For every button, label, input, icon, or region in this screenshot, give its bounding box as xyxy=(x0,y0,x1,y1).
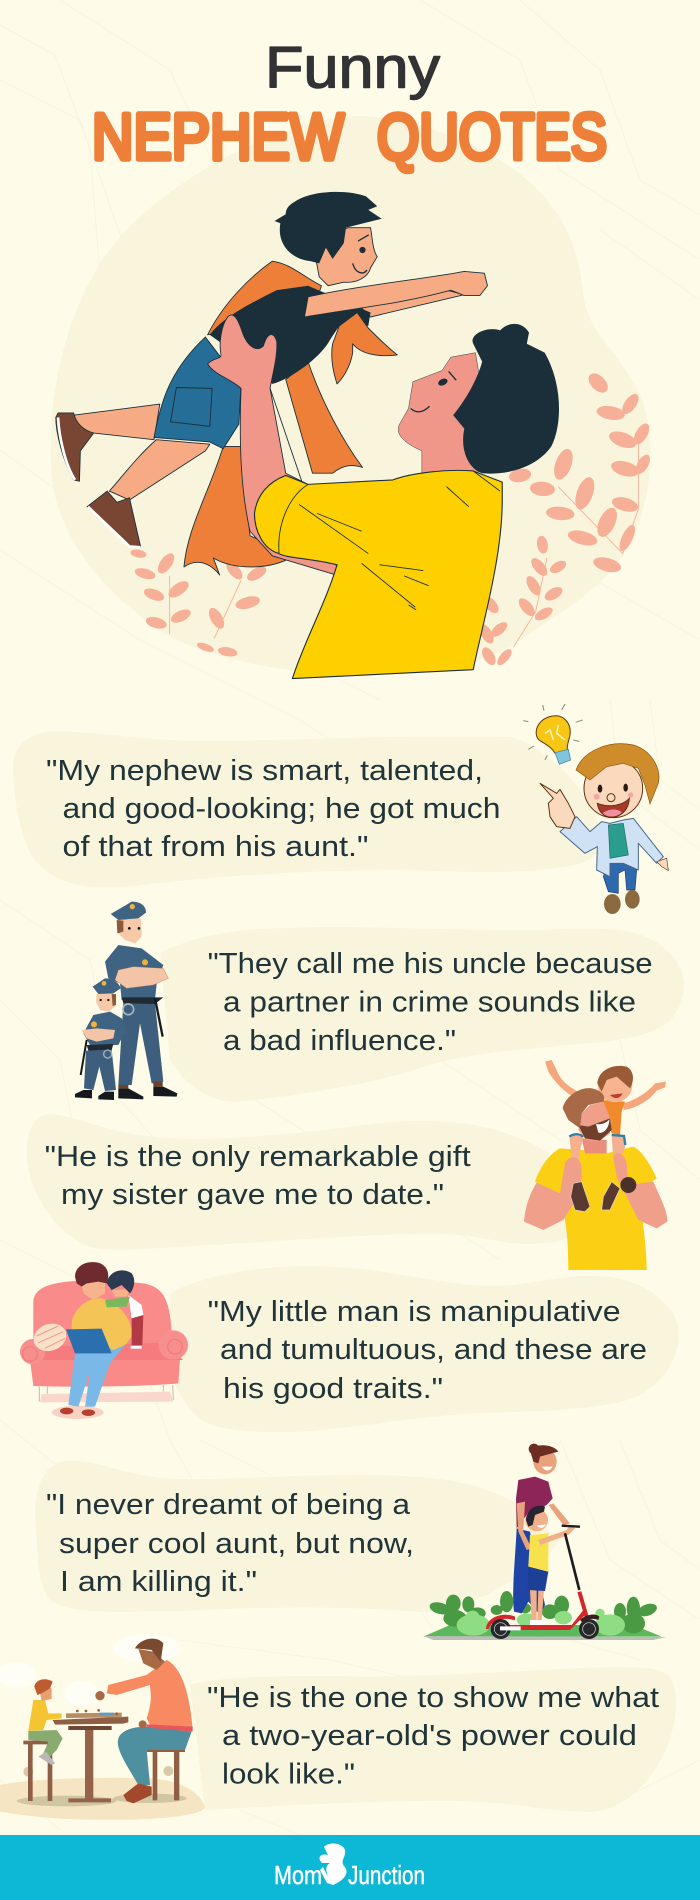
icon: aunt and nephew on sofa xyxy=(20,1262,188,1419)
decorative leaves xyxy=(130,370,653,668)
quote 1 text: and good-looking; he got much xyxy=(62,793,500,825)
father's neck and head xyxy=(563,1088,612,1153)
man: arms and hand xyxy=(208,315,339,576)
logo: MomJunction: Junction xyxy=(348,1860,425,1890)
panel: quote 4 xyxy=(170,1266,679,1432)
ground xyxy=(423,1625,667,1640)
panel: quote 3 xyxy=(27,1114,586,1250)
man: neck and face xyxy=(398,324,559,482)
title: nephew: NEPHEW xyxy=(92,100,345,173)
quote 5 text: I am killing it." xyxy=(60,1566,257,1598)
nephew xyxy=(105,1270,143,1349)
footer bar xyxy=(0,1835,700,1900)
floor shadow xyxy=(52,1406,104,1419)
icon: aunt and nephew on scooter xyxy=(423,1444,667,1640)
quote 2 text: "They call me his uncle because xyxy=(208,948,653,980)
title: Funny xyxy=(265,36,440,100)
quote 4 text: "My little man is manipulative xyxy=(208,1296,621,1328)
child legs xyxy=(569,1134,625,1163)
quote 2 bubble xyxy=(160,927,684,1102)
child arms xyxy=(545,1060,666,1110)
quote 3 text: my sister gave me to date." xyxy=(61,1179,444,1211)
boy: front arm and fist xyxy=(304,271,488,317)
quote 2 text: a partner in crime sounds like xyxy=(223,986,636,1018)
boy: shorts xyxy=(154,337,241,449)
title xyxy=(92,36,607,173)
stools xyxy=(23,1741,185,1801)
boy xyxy=(28,1679,63,1765)
icon: child on father's shoulders xyxy=(524,1060,667,1270)
quote 4 bubble xyxy=(170,1266,679,1432)
logo mother and child icon xyxy=(320,1844,347,1885)
scooter xyxy=(486,1526,599,1639)
boy: legs and shoes xyxy=(56,404,210,547)
panel: quote 2 xyxy=(160,927,684,1102)
father's shirt xyxy=(535,1147,657,1270)
quote 3 text xyxy=(45,1141,471,1211)
icon: man and boy playing chess xyxy=(0,1634,205,1820)
boy: head xyxy=(275,192,382,286)
father's arms xyxy=(524,1157,582,1230)
panel: quote 5 xyxy=(35,1461,560,1612)
adult officer xyxy=(105,902,177,1099)
logo: MomJunction: Mom xyxy=(274,1860,322,1890)
quote 6 text xyxy=(207,1682,659,1790)
pillow xyxy=(30,1319,70,1356)
quote 5 text: super cool aunt, but now, xyxy=(59,1528,414,1560)
boy: far arm xyxy=(362,290,464,317)
quote 4 text: his good traits." xyxy=(223,1373,443,1405)
quote 6 text: look like." xyxy=(222,1758,355,1790)
panel: quote 6 xyxy=(190,1667,676,1812)
quote 3 bubble xyxy=(27,1114,586,1250)
child shoes xyxy=(571,1182,620,1212)
illustration: man lifting nephew xyxy=(51,116,653,679)
woman legs and shoes xyxy=(68,1345,125,1407)
hero background blob xyxy=(51,116,650,675)
quote 4 text xyxy=(208,1296,647,1405)
aunt xyxy=(513,1444,570,1615)
boy head xyxy=(584,759,643,818)
pointing hand xyxy=(540,783,575,828)
icon: two police officers xyxy=(75,902,177,1100)
clouds and ground xyxy=(0,1634,205,1820)
woman sweater xyxy=(72,1298,132,1350)
bushes xyxy=(428,1591,659,1636)
man: yellow shirt xyxy=(254,470,502,679)
nephew xyxy=(525,1506,575,1625)
woman head xyxy=(75,1262,108,1300)
quote 6 text: a two-year-old's power could xyxy=(222,1720,637,1752)
quote 6 text: "He is the one to show me what xyxy=(207,1682,659,1714)
quote 4 text: and tumultuous, and these are xyxy=(220,1334,647,1366)
man xyxy=(95,1639,193,1803)
boy: scarf knot xyxy=(332,313,397,384)
child head and shirt xyxy=(597,1066,633,1135)
title: quotes: QUOTES xyxy=(377,100,607,173)
quote 5 text xyxy=(46,1489,414,1598)
light bulb xyxy=(523,704,583,764)
quote 2 text: a bad influence." xyxy=(223,1025,456,1057)
sofa xyxy=(20,1280,188,1402)
logo: MomJunction xyxy=(274,1844,425,1890)
quote 6 bubble xyxy=(190,1667,676,1812)
quote 2 text xyxy=(208,948,653,1057)
quote 5 bubble xyxy=(35,1461,560,1612)
panel: quote 1 xyxy=(13,731,601,888)
quote 1 text: "My nephew is smart, talented, xyxy=(46,755,483,787)
quote 1 text: of that from his aunt." xyxy=(62,831,368,863)
chess table xyxy=(53,1709,128,1802)
quote 5 text: "I never dreamt of being a xyxy=(46,1489,411,1521)
icon: boy with light bulb xyxy=(523,704,668,914)
boy: torso xyxy=(210,286,371,384)
quote 3 text: "He is the only remarkable gift xyxy=(45,1141,471,1173)
cape xyxy=(184,261,363,575)
child officer xyxy=(75,978,126,1100)
quote 1 text xyxy=(46,755,500,863)
laptop xyxy=(66,1329,112,1353)
boy body xyxy=(603,855,637,893)
quote 1 bubble xyxy=(13,731,601,888)
